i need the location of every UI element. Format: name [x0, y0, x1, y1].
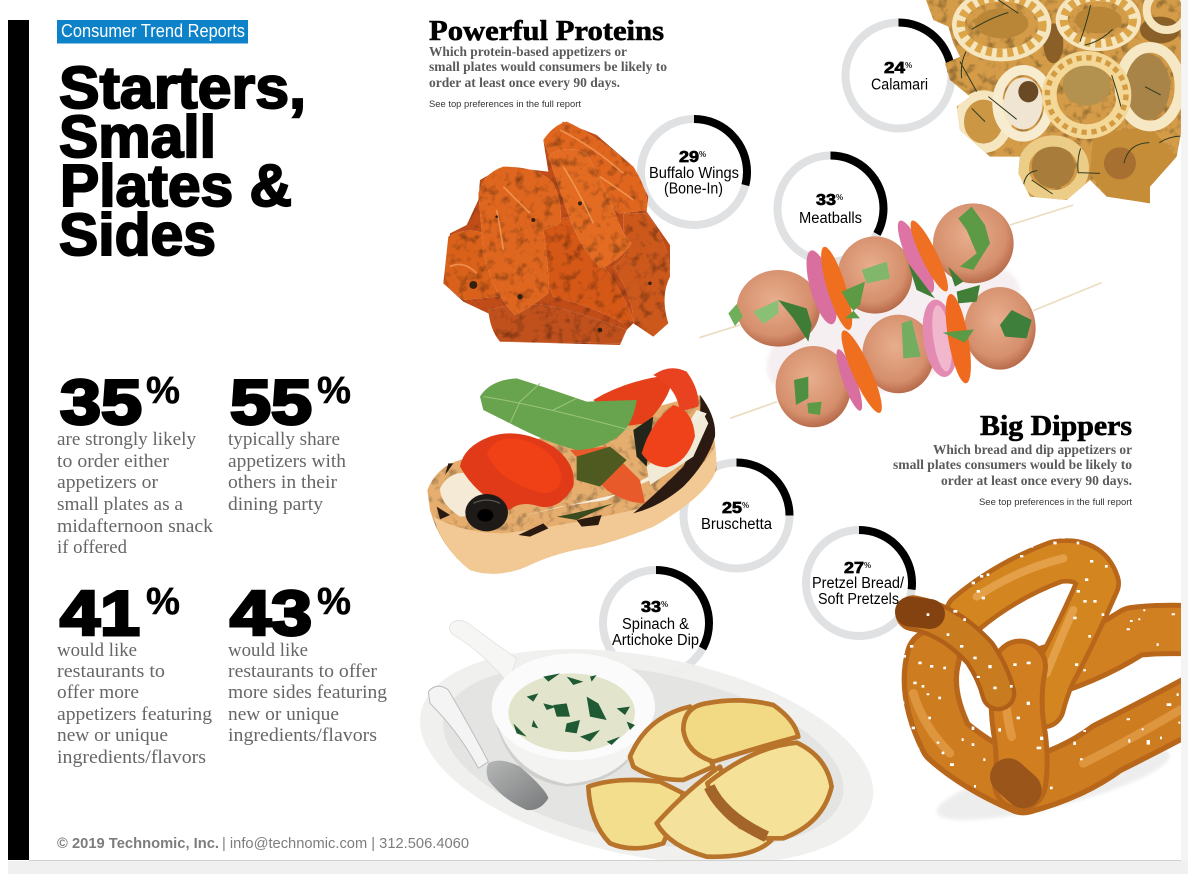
- stat: 55%: typically share: [228, 429, 340, 450]
- heading: Big Dippers: See top preferences in the full report: [979, 497, 1132, 508]
- stat: 43%: more sides featuring: [228, 682, 388, 703]
- stat: 41%: ingredients/flavors: [57, 747, 206, 768]
- stat: 41%: offer more: [57, 682, 139, 703]
- heading: Powerful Proteins: order at least once every 90 days.: [429, 75, 620, 90]
- stat: 35%: are strongly likely: [57, 429, 196, 450]
- heading: Big Dippers: small plates consumers would be likely to: [893, 457, 1132, 472]
- photo: bruschetta: [427, 368, 717, 574]
- stat: 35%: appetizers or: [57, 472, 159, 493]
- label: bruschetta: %: [742, 501, 749, 510]
- footer: | info@technomic.com | 312.506.4060: [222, 836, 469, 852]
- label: calamari: [871, 60, 928, 94]
- heading: Big Dippers: [893, 411, 1132, 508]
- toast slices: [588, 700, 832, 857]
- heading: Big Dippers: Big Dippers: [980, 411, 1132, 442]
- label: meatballs: %: [836, 193, 843, 202]
- ring: calamari 24%: [846, 22, 952, 128]
- label: spinach artichoke dip: Artichoke Dip: [612, 632, 699, 649]
- label: meatballs: 33: [816, 192, 836, 209]
- label: bruschetta: [701, 500, 772, 533]
- stat: 41%: new or unique: [57, 725, 168, 746]
- label: spinach artichoke dip: 33: [641, 599, 661, 616]
- title: Plates &: [60, 153, 292, 219]
- photo: pretzel: [902, 536, 1188, 835]
- stat: 43%: ingredients/flavors: [228, 725, 377, 746]
- stat: 43%: would like: [228, 640, 308, 661]
- stat: 41%: appetizers featuring: [57, 704, 213, 725]
- stat: 41%: would like: [57, 640, 137, 661]
- tag: Consumer Trend Reports: Consumer Trend Reports: [61, 20, 245, 41]
- label: calamari: %: [905, 61, 912, 70]
- ring: meatballs 33%: [778, 156, 884, 262]
- label: buffalo wings: Buffalo Wings: [649, 165, 739, 182]
- stat: 55%: 55: [230, 368, 312, 438]
- stat: 43%: restaurants to offer: [228, 661, 378, 682]
- stat: 35%: small plates as a: [57, 494, 184, 515]
- ring: buffalo wings 29%: [641, 119, 747, 225]
- stat: 55%: others in their: [228, 472, 338, 493]
- stat: 43%: %: [317, 581, 351, 623]
- title: [59, 55, 306, 268]
- photo: meatball skewers: [699, 203, 1102, 429]
- footer: [57, 836, 469, 852]
- stat: 43%: new or unique: [228, 704, 339, 725]
- stat: 35%: 35: [60, 368, 142, 438]
- heading: Powerful Proteins: Which protein-based appetizers or: [429, 44, 627, 59]
- label: spinach artichoke dip: [612, 599, 699, 649]
- stat: 41%: [57, 579, 213, 768]
- label: pretzel bread: Soft Pretzels: [818, 591, 899, 608]
- label: calamari: Calamari: [871, 76, 928, 94]
- label: bruschetta: Bruschetta: [701, 516, 772, 533]
- stat: 55%: %: [317, 370, 351, 412]
- ring: bruschetta 25%: [684, 462, 790, 568]
- stat: 55%: appetizers with: [228, 451, 347, 472]
- photo: buffalo wings: [443, 122, 670, 345]
- heading: Powerful Proteins: See top preferences in the full report: [429, 99, 581, 110]
- heading: Big Dippers: order at least once every 90 days.: [941, 473, 1132, 488]
- photo: plate with spinach dip and toast: [420, 620, 873, 860]
- stat: 35%: to order either: [57, 451, 170, 472]
- label: pretzel bread: [812, 560, 905, 608]
- stat: 43%: [228, 579, 388, 746]
- label: meatballs: [799, 192, 862, 227]
- title: Small: [59, 104, 216, 170]
- stat: 35%: [57, 368, 214, 558]
- spreader knife: [428, 686, 548, 810]
- stat: 55%: [228, 368, 351, 515]
- stat: 35%: %: [146, 370, 180, 412]
- label: buffalo wings: %: [699, 150, 706, 159]
- stat: 41%: restaurants to: [57, 661, 165, 682]
- label: spinach artichoke dip: Spinach &: [622, 616, 690, 633]
- label: buffalo wings: [649, 149, 739, 198]
- stat: 41%: 41: [60, 579, 140, 649]
- title: Sides: [59, 202, 216, 268]
- title: Starters,: [59, 55, 306, 121]
- heading: Powerful Proteins: Powerful Proteins: [429, 16, 664, 47]
- stat: 43%: 43: [230, 579, 312, 649]
- heading: Powerful Proteins: small plates would consumers be likely to: [429, 59, 667, 74]
- heading: Powerful Proteins: [429, 16, 667, 110]
- black side bar: [8, 20, 29, 860]
- photo: calamari: [920, 0, 1187, 207]
- label: pretzel bread: %: [864, 561, 871, 570]
- stat: 55%: dining party: [228, 494, 324, 515]
- stat: 41%: %: [146, 581, 180, 623]
- ring: pretzel 27%: [806, 530, 912, 636]
- ramekin: [450, 620, 655, 787]
- heading: Big Dippers: Which bread and dip appetizers or: [933, 442, 1132, 457]
- footer: © 2019 Technomic, Inc.: [57, 836, 219, 852]
- label: buffalo wings: (Bone-In): [664, 180, 723, 198]
- label: pretzel bread: 27: [844, 560, 864, 577]
- label: bruschetta: 25: [722, 500, 742, 517]
- label: buffalo wings: 29: [679, 149, 699, 166]
- label: pretzel bread: Pretzel Bread/: [812, 575, 905, 592]
- label: meatballs: Meatballs: [799, 210, 862, 227]
- stat: 35%: if offered: [57, 537, 127, 558]
- stat: 35%: midafternoon snack: [57, 516, 214, 537]
- label: calamari: 24: [884, 60, 905, 77]
- label: spinach artichoke dip: %: [661, 600, 668, 609]
- ring: spinach dip 33%: [603, 570, 709, 676]
